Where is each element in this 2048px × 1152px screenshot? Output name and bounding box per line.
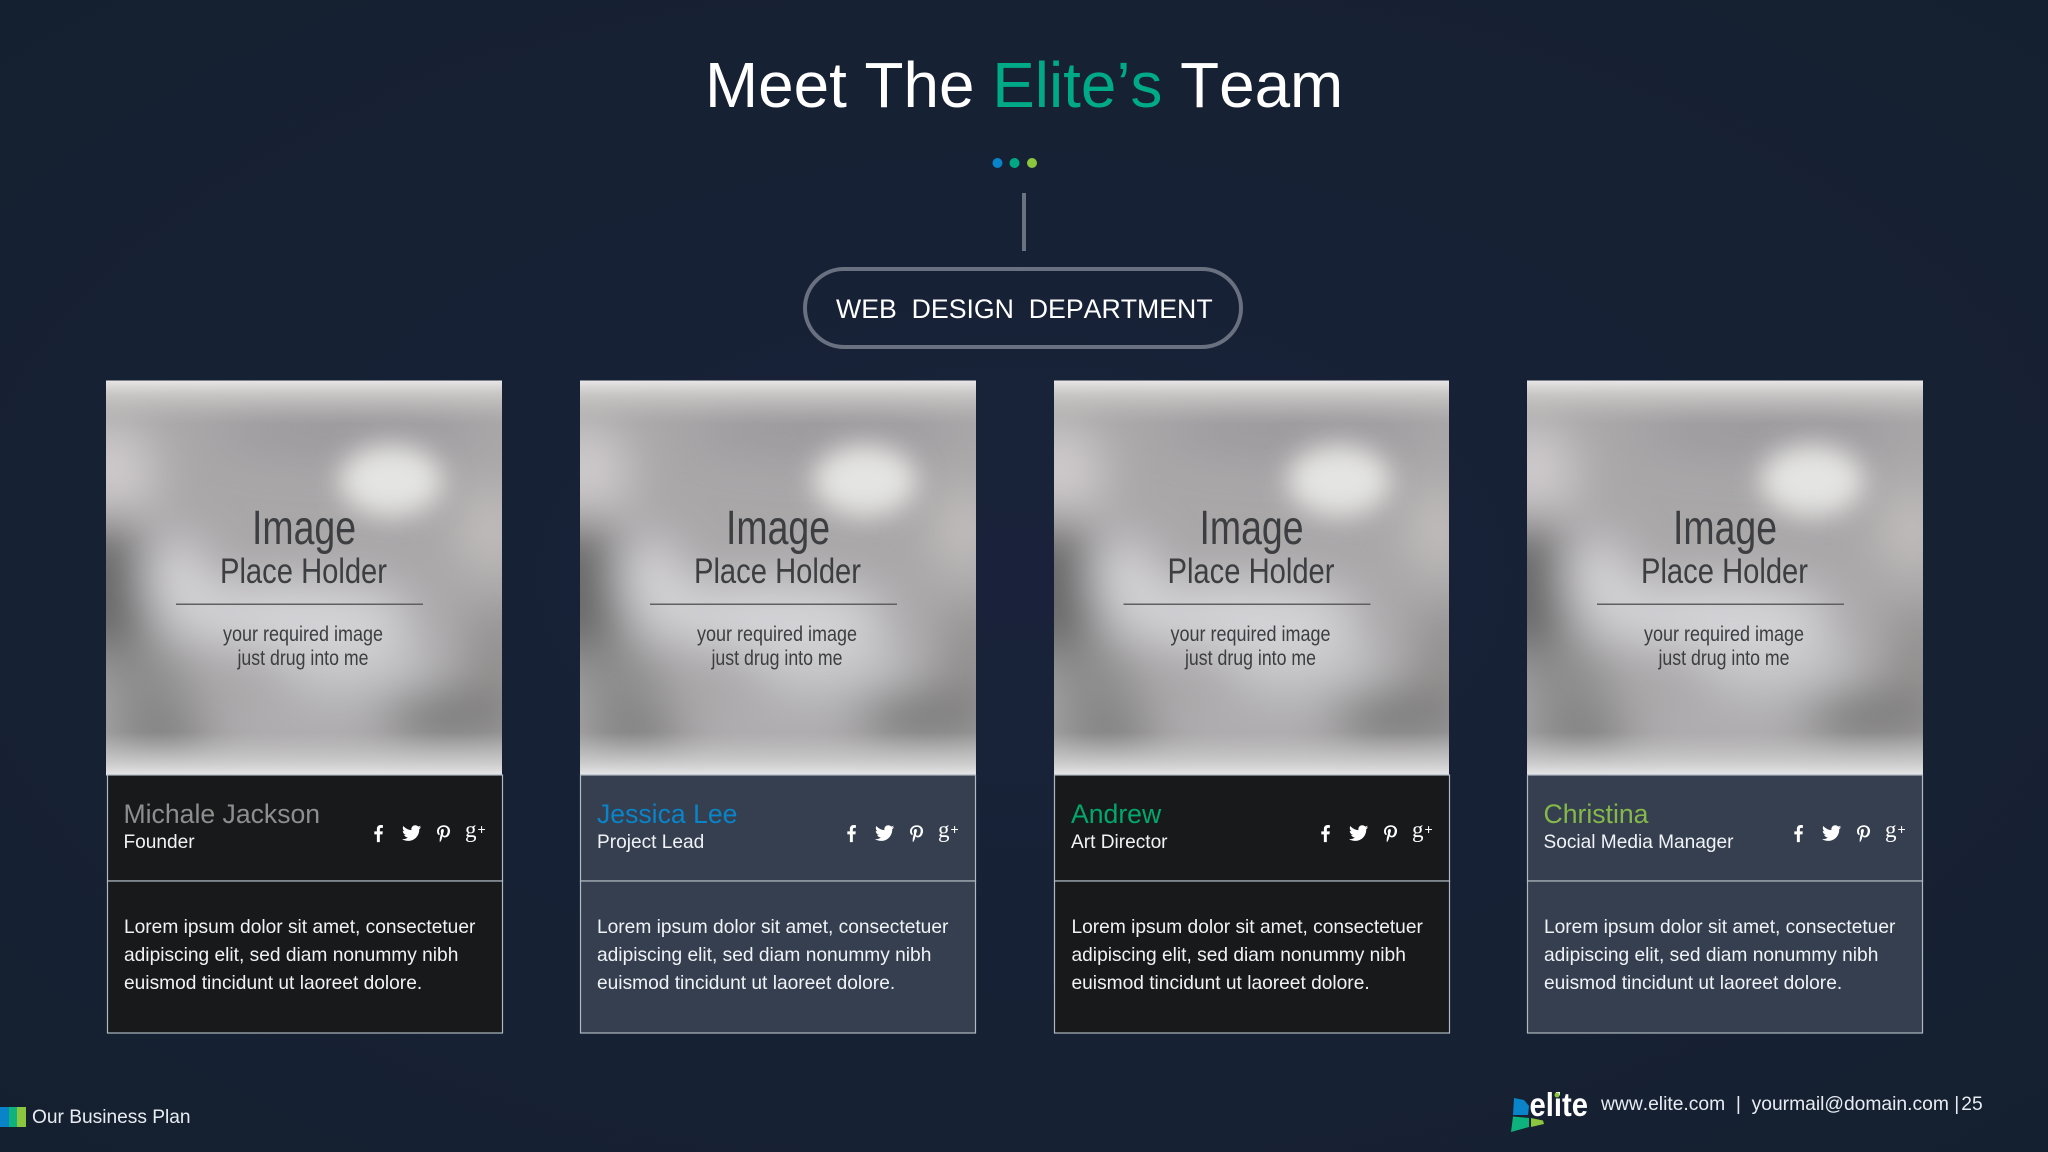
image placeholder 3: just drug into me (1184, 646, 1316, 670)
description box 2 (580, 881, 976, 1033)
footer: contact and page number: www.elite.com | yourmail@domain.com |25 (1600, 1094, 1983, 1115)
image placeholder 1: just drug into me (237, 646, 368, 670)
social icons 2: + (950, 821, 959, 837)
name and role box 2 (580, 775, 976, 881)
footer: business plan label: Our Business Plan (32, 1107, 191, 1128)
name and role box 3: Andrew (1071, 799, 1162, 829)
description box 4: adipiscing elit, sed diam nonummy nibh (1544, 945, 1878, 966)
image placeholder 1: your required image (223, 622, 383, 646)
image placeholder 1 (56, 380, 531, 776)
description box 1: adipiscing elit, sed diam nonummy nibh (124, 945, 458, 966)
name and role box 1: Founder (124, 832, 195, 853)
title: Meet The Elite’s Team (705, 49, 1343, 121)
social icons 1: + (478, 821, 486, 837)
image placeholder 3: your required image (1170, 622, 1330, 646)
image placeholder 2: your required image (697, 622, 857, 646)
image placeholder 3: Image (1200, 502, 1304, 555)
image placeholder 4: your required image (1644, 622, 1804, 646)
social icons 1: g (465, 817, 477, 842)
panel: team card 2 (530, 380, 1005, 1033)
description box 4: euismod tincidunt ut laoreet dolore. (1544, 973, 1842, 994)
social icons 2 (847, 817, 959, 842)
social icons 3: g (1412, 817, 1424, 842)
image placeholder 4: Image (1673, 502, 1777, 555)
description box 1 (108, 881, 502, 1033)
panel: team card 4 (1477, 380, 1952, 1033)
social icons 1 (374, 817, 486, 842)
name and role box 4: Christina (1544, 799, 1649, 829)
department pill (805, 269, 1241, 347)
social icons 4: + (1898, 821, 1906, 837)
description box 2: euismod tincidunt ut laoreet dolore. (597, 973, 895, 994)
name and role box 1: Michale Jackson (124, 799, 320, 829)
name and role box 3: Art Director (1071, 832, 1168, 853)
name and role box 3 (1054, 775, 1450, 881)
name and role box 4: Social Media Manager (1544, 832, 1734, 853)
image placeholder 3 (1004, 380, 1479, 776)
footer: elite logo (1511, 1086, 1588, 1132)
description box 3: euismod tincidunt ut laoreet dolore. (1072, 973, 1370, 994)
description box 3 (1054, 881, 1450, 1033)
connector line (1022, 193, 1026, 251)
image placeholder 2: Image (726, 502, 830, 555)
panel: team card 1 (56, 380, 531, 1033)
description box 2: adipiscing elit, sed diam nonummy nibh (597, 945, 931, 966)
description box 3: adipiscing elit, sed diam nonummy nibh (1072, 945, 1406, 966)
social icons 3 (1321, 817, 1433, 842)
name and role box 1 (108, 775, 502, 881)
image placeholder 1: Place Holder (220, 552, 387, 591)
image placeholder 4: Place Holder (1641, 552, 1808, 591)
image placeholder 4 (1477, 380, 1952, 776)
image placeholder 2 (530, 380, 1005, 776)
three colour dots (992, 158, 1037, 168)
description box 1: Lorem ipsum dolor sit amet, consectetuer (124, 917, 476, 938)
social icons 4: g (1885, 817, 1897, 842)
description box 4 (1528, 881, 1922, 1033)
social icons 4 (1794, 817, 1906, 842)
description box 2: Lorem ipsum dolor sit amet, consectetuer (597, 917, 949, 938)
name and role box 4 (1528, 775, 1922, 881)
image placeholder 4: just drug into me (1658, 646, 1790, 670)
image placeholder 2: Place Holder (694, 552, 861, 591)
department pill: WEB DESIGN DEPARTMENT (836, 294, 1213, 324)
description box 4: Lorem ipsum dolor sit amet, consectetuer (1544, 917, 1896, 938)
image placeholder 2: just drug into me (711, 646, 842, 670)
description box 3: Lorem ipsum dolor sit amet, consectetuer (1072, 917, 1423, 938)
image placeholder 3: Place Holder (1168, 552, 1335, 591)
social icons 2: g (938, 817, 950, 842)
description box 1: euismod tincidunt ut laoreet dolore. (124, 973, 422, 994)
image placeholder 1: Image (252, 502, 356, 555)
name and role box 2: Jessica Lee (597, 799, 737, 829)
social icons 3: + (1424, 821, 1433, 837)
panel: team card 3 (1004, 380, 1479, 1033)
footer: elite logo: elite (1530, 1086, 1588, 1123)
name and role box 2: Project Lead (597, 832, 704, 853)
